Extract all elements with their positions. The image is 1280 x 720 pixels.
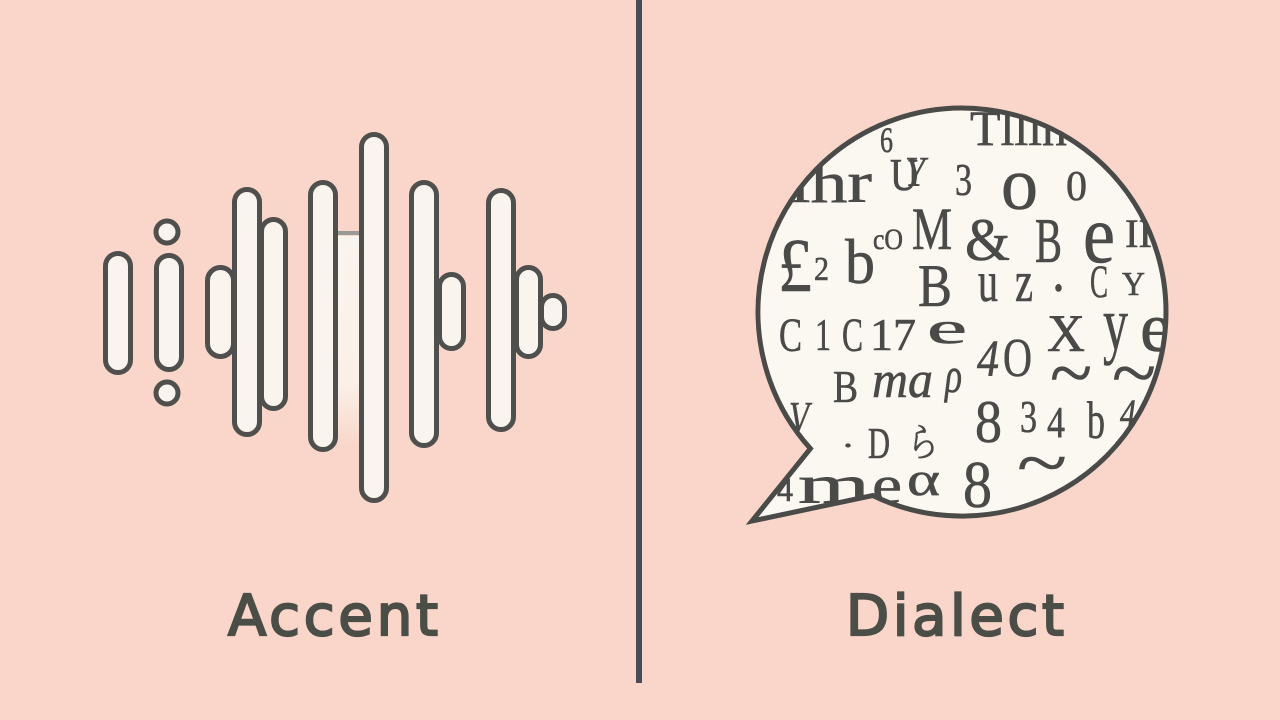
bubble letters: Tllln bbox=[970, 100, 1067, 156]
bubble letters: B bbox=[833, 362, 858, 412]
bubble letters: b bbox=[845, 227, 875, 297]
bubble letters: · bbox=[1050, 255, 1067, 321]
bubble letters: Y bbox=[1122, 266, 1145, 303]
bubble letters: e bbox=[927, 304, 967, 353]
bubble letters: D bbox=[868, 419, 890, 468]
bubble letters: α bbox=[907, 453, 940, 506]
bubble letters: 6 bbox=[880, 120, 893, 160]
bubble letters: X bbox=[1047, 305, 1085, 363]
bubble letters bbox=[777, 100, 1172, 522]
bubble letters: 4 bbox=[977, 331, 999, 388]
bubble letters: . bbox=[843, 421, 853, 454]
bubble letters: ~ bbox=[1017, 425, 1067, 502]
bubble letters: 0 bbox=[1066, 164, 1087, 210]
bubble letters: B bbox=[918, 253, 952, 319]
bubble letters: u bbox=[978, 249, 998, 314]
bubble letters: ihr bbox=[790, 150, 872, 215]
bubble letters: U bbox=[890, 149, 918, 200]
bubble letters: e bbox=[1083, 188, 1115, 280]
bubble letters: & bbox=[965, 207, 1010, 273]
bubble letters: ら bbox=[908, 420, 938, 465]
bubble letters: 3 bbox=[955, 154, 972, 205]
bubble letters: 4 bbox=[1120, 391, 1136, 436]
bubble letters: C bbox=[1090, 256, 1108, 308]
bubble letters: B bbox=[1035, 206, 1062, 276]
bubble letters: ~ bbox=[1112, 331, 1156, 415]
bubble letters: C bbox=[842, 309, 863, 362]
bubble letters: II bbox=[1125, 211, 1152, 256]
bubble letters: m bbox=[798, 455, 870, 515]
bubble letters: b bbox=[1087, 392, 1105, 450]
bubble letters: 8 bbox=[963, 448, 992, 522]
bubble letters: 1 bbox=[815, 309, 831, 360]
bubble letters: ma bbox=[872, 352, 933, 409]
bubble letters: ρ bbox=[944, 347, 962, 403]
bubble letters: Y bbox=[905, 150, 929, 196]
bubble letters: 4 bbox=[1047, 398, 1065, 447]
bubble letters: C bbox=[779, 309, 802, 362]
bubble letters: ~ bbox=[1050, 331, 1092, 415]
bubble letters: e bbox=[872, 455, 902, 515]
bubble letters: 2 bbox=[814, 251, 829, 288]
bubble letters: 17 bbox=[870, 309, 916, 360]
label: Accent: Accent bbox=[228, 584, 438, 649]
divider line bbox=[636, 0, 642, 683]
bubble letters: 3 bbox=[1020, 391, 1037, 442]
bubble letters: 8 bbox=[975, 389, 1002, 455]
bubble letters: y bbox=[1103, 282, 1128, 366]
bubble letters: V bbox=[789, 392, 812, 443]
icon: accent sound waveform bbox=[106, 134, 564, 500]
bubble letters: z bbox=[1015, 249, 1033, 314]
bubble letters: M bbox=[912, 196, 952, 262]
bubble letters: e bbox=[1140, 290, 1172, 367]
bubble letters: cO bbox=[873, 223, 903, 256]
bubble letters: £ bbox=[778, 224, 812, 308]
bubble letters: o bbox=[1001, 144, 1038, 226]
bubble letters: O bbox=[1003, 327, 1032, 388]
icon: dialect speech bubble with letters bbox=[752, 100, 1172, 522]
label: Dialect: Dialect bbox=[846, 584, 1064, 649]
bubble letters: 4 bbox=[777, 472, 793, 509]
